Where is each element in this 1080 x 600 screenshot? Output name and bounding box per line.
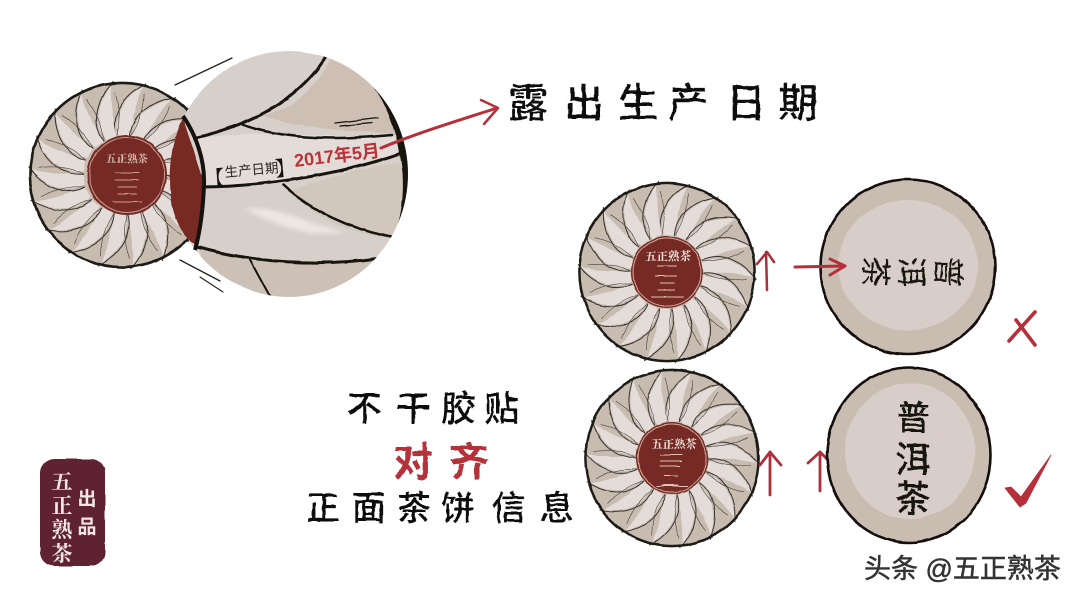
seal stamp: 正 <box>52 494 72 518</box>
arrow to title <box>381 100 498 148</box>
back of cake with upright text <box>827 368 991 542</box>
back of cake with sideways text <box>820 180 996 354</box>
sideways text: 茶 <box>857 256 892 288</box>
date label: 生产日期 <box>224 160 279 180</box>
check mark <box>1005 455 1051 507</box>
cake label: 五正熟茶 <box>651 437 697 451</box>
caption <box>306 390 574 528</box>
cross mark <box>1009 312 1035 345</box>
up arrows, aligned <box>760 452 831 495</box>
cake label <box>631 236 703 308</box>
upright text <box>895 400 931 519</box>
tea cake front, correct row <box>584 368 760 548</box>
cake label <box>636 422 708 494</box>
red pointer arrow <box>795 259 845 275</box>
tea cake front, left <box>28 81 216 269</box>
upright text: 茶 <box>895 478 931 519</box>
upright text: 洱 <box>895 439 931 480</box>
up arrow, cake edge <box>757 252 774 290</box>
cake label: 五正熟茶 <box>106 152 148 165</box>
date label: 【 <box>204 167 225 191</box>
watermark: 头条 @五正熟茶 <box>864 554 1061 584</box>
ribbon outlines <box>195 55 406 297</box>
tea cake front, incorrect row <box>578 181 756 363</box>
date label <box>204 140 381 191</box>
lens edge of the cake label <box>170 118 205 245</box>
seal stamp: 茶 <box>52 542 72 566</box>
date label: 】 <box>274 156 296 181</box>
title: 露出生产日期 <box>508 82 818 126</box>
caption: 正面茶饼信息 <box>306 490 574 528</box>
cake label: 五正熟茶 <box>645 249 691 263</box>
seal stamp: 出 <box>77 488 97 510</box>
sideways text: 洱 <box>893 256 928 288</box>
magnifier circle showing production date <box>170 50 410 300</box>
sideways text: 普 <box>930 256 965 288</box>
seal stamp: 熟 <box>52 518 74 542</box>
upright text: 普 <box>896 400 930 438</box>
cake label <box>87 135 167 215</box>
seal stamp: 品 <box>77 517 97 538</box>
caption: 对齐 <box>393 441 489 485</box>
motion lines <box>175 58 232 292</box>
seal stamp: 五 <box>52 470 72 494</box>
date label: 2017年5月 <box>293 140 381 171</box>
seal stamp <box>40 459 105 566</box>
caption: 不干胶贴 <box>347 390 519 429</box>
sideways text <box>857 256 965 288</box>
